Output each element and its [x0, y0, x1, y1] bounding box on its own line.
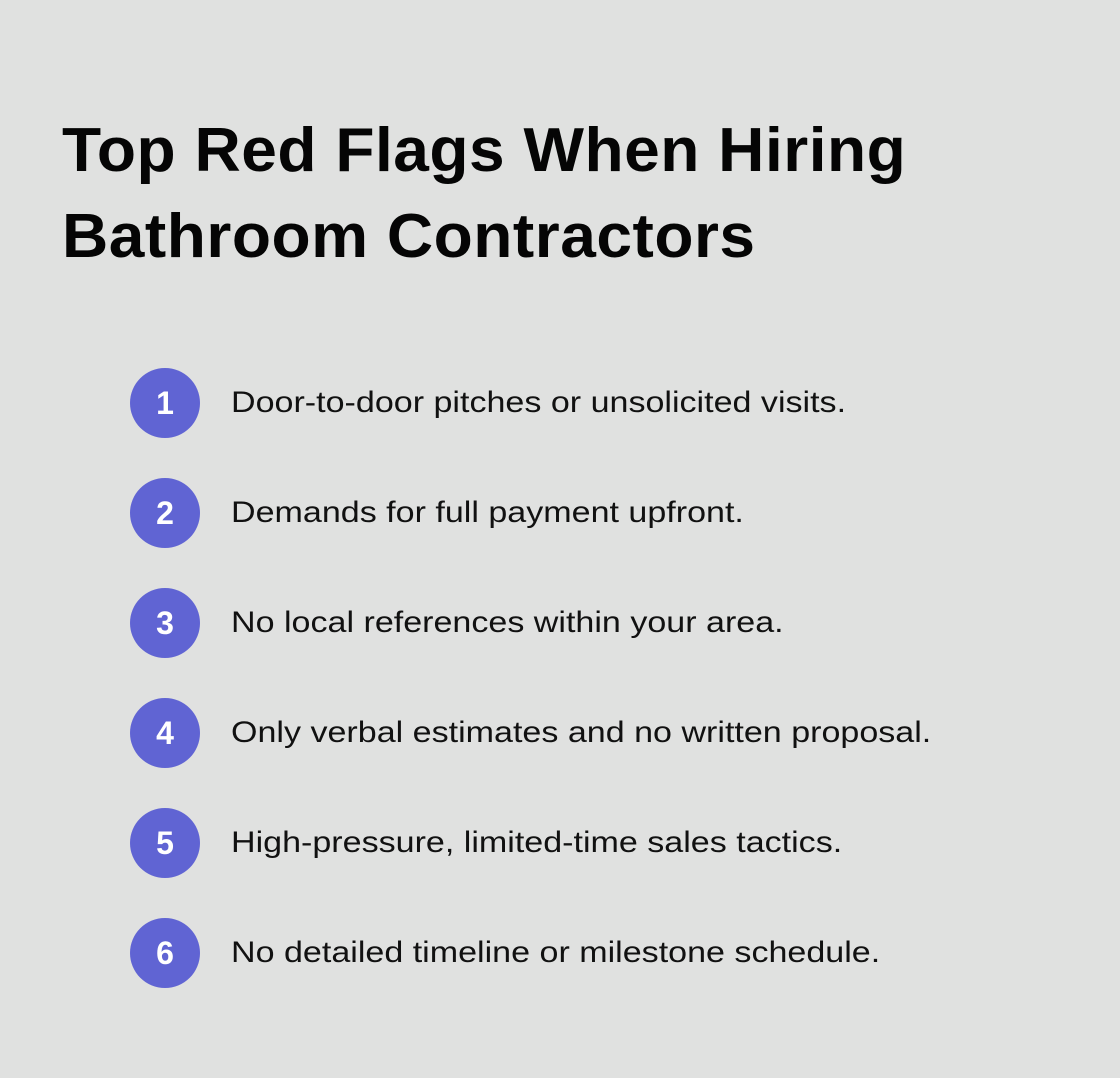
item 1: Door-to-door pitches or unsolicited visits. [231, 386, 846, 419]
item 3: 3 [156, 605, 174, 641]
item 2 [130, 478, 744, 548]
item 3 [130, 588, 784, 658]
item 1 [130, 368, 846, 438]
item 2: 2 [156, 495, 174, 531]
title [62, 116, 906, 271]
item 6: No detailed timeline or milestone schedule. [231, 936, 880, 969]
item 1: 1 [156, 385, 174, 421]
item 5: High-pressure, limited-time sales tactics. [231, 826, 842, 859]
item 2: Demands for full payment upfront. [231, 496, 744, 529]
item 4: Only verbal estimates and no written proposal. [231, 716, 931, 749]
item 4 [130, 698, 931, 768]
title: Top Red Flags When Hiring [62, 116, 906, 185]
item 5: 5 [156, 825, 174, 861]
item 6: 6 [156, 935, 174, 971]
item 5 [130, 808, 842, 878]
title: Bathroom Contractors [62, 202, 756, 271]
item 3: No local references within your area. [231, 606, 784, 639]
item 6 [130, 918, 880, 988]
item 4: 4 [156, 715, 174, 751]
